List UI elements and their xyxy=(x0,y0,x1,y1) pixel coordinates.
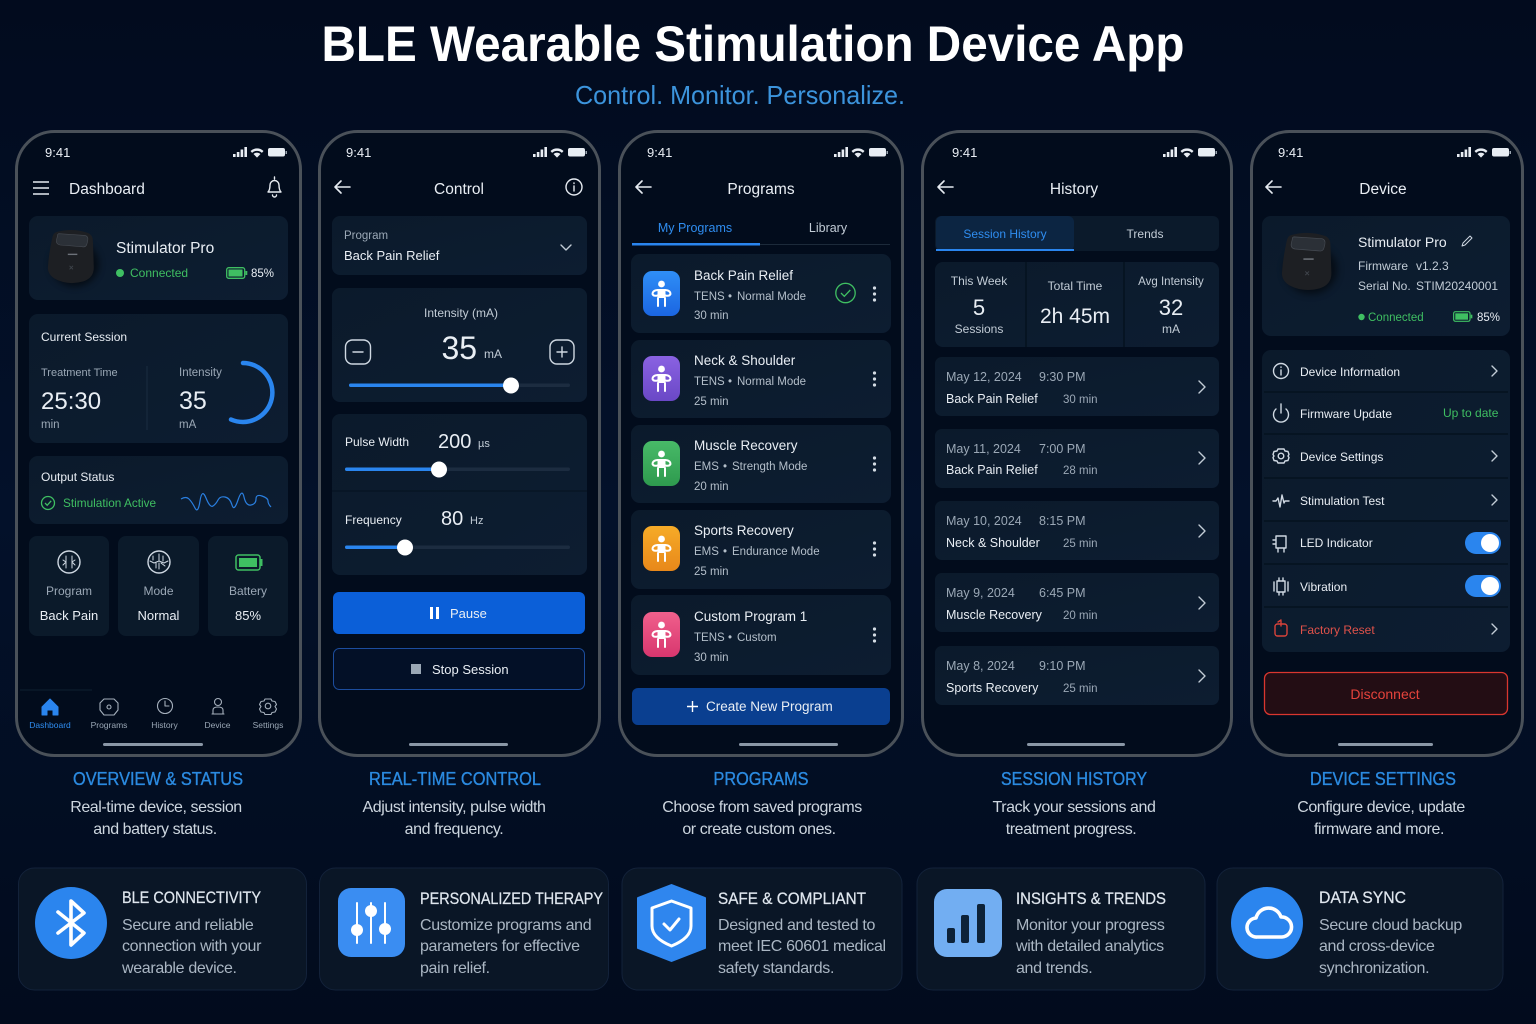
home indicator xyxy=(409,743,508,746)
program: sports recovery: Endurance Mode xyxy=(732,546,820,558)
tile: program xyxy=(29,536,109,636)
feature: BLE connectivity: wearable device. xyxy=(121,960,237,977)
device card: 85% xyxy=(1477,312,1500,324)
tile: battery xyxy=(208,536,288,636)
feature: insights and trends: Monitor your progress xyxy=(1016,917,1165,934)
intensity card xyxy=(332,288,587,402)
current session card: Current Session xyxy=(41,330,127,344)
tabs: My Programs xyxy=(658,221,732,235)
output status card: Stimulation Active xyxy=(63,496,157,510)
status bar xyxy=(45,145,287,160)
feature: safe and compliant: meet IEC 60601 medical xyxy=(718,938,886,955)
caption: programs: PROGRAMS xyxy=(714,769,808,789)
row: stimulation test xyxy=(1273,494,1497,508)
pulse and frequency card xyxy=(332,414,587,575)
program: neck and shoulder: • xyxy=(728,376,732,388)
feature: insights and trends xyxy=(917,868,1205,990)
session row 4: 6:45 PM xyxy=(1039,586,1086,600)
device card xyxy=(1262,216,1510,336)
session row 5 xyxy=(935,646,1219,705)
device card: 85% xyxy=(251,268,274,280)
program selector xyxy=(332,216,587,275)
feature: personalized therapy: PERSONALIZED THERAPY xyxy=(420,889,603,908)
status bar xyxy=(346,145,587,160)
caption: session history: SESSION HISTORY xyxy=(1001,769,1147,789)
tabs: Session History xyxy=(963,227,1047,241)
feature: data sync: Secure cloud backup xyxy=(1319,917,1462,934)
intensity card: mA xyxy=(484,347,502,361)
status bar: 9:41 xyxy=(1278,145,1303,160)
program: custom program 1: Custom xyxy=(737,632,777,644)
caption: real-time control: REAL-TIME CONTROL xyxy=(369,769,541,789)
pulse and frequency card: Hz xyxy=(470,515,483,527)
tabs: Library xyxy=(809,221,848,235)
header: History xyxy=(1050,181,1098,198)
device card: STIM20240001 xyxy=(1416,279,1498,293)
session row 5: 25 min xyxy=(1063,683,1098,695)
feature: insights and trends: INSIGHTS & TRENDS xyxy=(1016,889,1166,908)
tile: mode xyxy=(118,536,199,636)
row: factory reset xyxy=(1275,620,1497,637)
caption: overview and status: Real-time device, session xyxy=(70,799,242,816)
status bar xyxy=(647,145,888,160)
caption: real-time control xyxy=(363,769,545,838)
caption: session history: Track your sessions and xyxy=(993,799,1155,816)
session row 2: 7:00 PM xyxy=(1039,442,1086,456)
session row 4 xyxy=(935,573,1219,632)
header xyxy=(938,181,1098,198)
tile: battery: Battery xyxy=(229,584,267,598)
program: custom program 1: 30 min xyxy=(694,652,729,664)
row: factory reset: Factory Reset xyxy=(1300,623,1375,637)
program: custom program 1: Custom Program 1 xyxy=(694,609,807,624)
feature: data sync: DATA SYNC xyxy=(1319,888,1406,907)
feature: personalized therapy xyxy=(320,868,608,990)
row: device information: Device Information xyxy=(1300,365,1400,379)
program: sports recovery: Sports Recovery xyxy=(694,523,794,538)
feature: safe and compliant xyxy=(622,868,902,990)
stats card: 2h 45m xyxy=(1040,305,1110,328)
feature: safe and compliant: safety standards. xyxy=(718,960,834,977)
intensity card: Intensity (mA) xyxy=(424,306,498,320)
caption: device settings: firmware and more. xyxy=(1314,821,1444,838)
program: muscle recovery: 20 min xyxy=(694,481,729,493)
pulse and frequency card: µs xyxy=(478,438,490,450)
session row 2: 28 min xyxy=(1063,465,1098,477)
pause button: Pause xyxy=(450,606,487,621)
row: firmware update xyxy=(1274,404,1499,422)
caption: session history xyxy=(993,769,1155,838)
caption: programs: Choose from saved programs xyxy=(662,799,862,816)
icon: cloud xyxy=(1231,887,1303,959)
program selector: Back Pain Relief xyxy=(344,248,440,263)
program: neck and shoulder: Neck & Shoulder xyxy=(694,353,796,368)
feature: personalized therapy: parameters for effective xyxy=(420,938,580,955)
row: device settings xyxy=(1273,449,1497,464)
stats card: Sessions xyxy=(955,322,1003,336)
row: vibration: Vibration xyxy=(1300,580,1347,594)
row: stimulation test: Stimulation Test xyxy=(1300,494,1385,508)
status bar xyxy=(952,145,1217,160)
phone 4: history xyxy=(922,132,1232,756)
program: sports recovery: EMS xyxy=(694,546,719,558)
header: Device xyxy=(1359,181,1407,198)
caption: session history: treatment progress. xyxy=(1006,821,1136,838)
row: firmware update: Up to date xyxy=(1443,406,1499,420)
header: Dashboard xyxy=(69,181,145,198)
stats card: Total Time xyxy=(1048,279,1103,293)
feature: personalized therapy: pain relief. xyxy=(420,960,490,977)
header xyxy=(1266,181,1407,198)
session row 1 xyxy=(935,357,1219,416)
current session card: mA xyxy=(179,419,197,431)
phone 3: programs xyxy=(620,132,902,756)
title: BLE Wearable Stimulation Device App xyxy=(322,16,1184,72)
session row 4: May 9, 2024 xyxy=(946,586,1015,600)
session row 3: 25 min xyxy=(1063,538,1098,550)
session row 3: Neck & Shoulder xyxy=(946,536,1040,550)
pulse and frequency card: 80 xyxy=(441,508,463,530)
session row 3 xyxy=(935,501,1219,560)
stats card: 32 xyxy=(1159,295,1183,320)
tabs xyxy=(935,216,1219,251)
session row 3: 8:15 PM xyxy=(1039,514,1086,528)
stats card: 5 xyxy=(973,295,985,320)
program: back pain relief: Back Pain Relief xyxy=(694,268,793,283)
bottom navigation: Device xyxy=(205,720,231,730)
caption: device settings: DEVICE SETTINGS xyxy=(1310,769,1456,789)
phone 1: dashboard xyxy=(16,132,300,756)
tile: mode: Normal xyxy=(138,608,180,623)
feature: BLE connectivity: connection with your xyxy=(122,938,262,955)
device card: Connected xyxy=(130,266,188,280)
status bar: 9:41 xyxy=(952,145,977,160)
subtitle: Control. Monitor. Personalize. xyxy=(575,80,905,110)
session row 3: May 10, 2024 xyxy=(946,514,1022,528)
home indicator xyxy=(1338,743,1433,746)
program: muscle recovery xyxy=(631,425,891,503)
tabs xyxy=(632,221,890,246)
stop button xyxy=(334,648,584,690)
program: muscle recovery: EMS xyxy=(694,461,719,473)
caption: device settings: Configure device, update xyxy=(1297,799,1465,816)
program selector: Program xyxy=(344,230,388,242)
caption: overview and status: OVERVIEW & STATUS xyxy=(73,769,243,789)
phone 2: control xyxy=(320,132,600,756)
program: back pain relief: TENS xyxy=(694,291,725,303)
pause button xyxy=(333,592,585,634)
status bar: 9:41 xyxy=(45,145,70,160)
program: muscle recovery: • xyxy=(723,461,727,473)
feature: BLE connectivity: BLE CONNECTIVITY xyxy=(122,888,261,907)
tile: program: Back Pain xyxy=(40,608,98,623)
device card: Stimulator Pro xyxy=(1358,234,1447,250)
caption: programs xyxy=(662,769,862,838)
stats card: mA xyxy=(1162,322,1180,336)
bottom navigation: Settings xyxy=(253,720,283,730)
row: led indicator: LED Indicator xyxy=(1300,536,1373,550)
feature: data sync: synchronization. xyxy=(1319,960,1429,977)
session row 2 xyxy=(935,429,1219,488)
disconnect button: Disconnect xyxy=(1350,686,1420,702)
create new program button xyxy=(632,688,890,725)
caption: real-time control: Adjust intensity, pulse width xyxy=(363,799,545,816)
stop button: Stop Session xyxy=(432,662,509,677)
current session card: Intensity xyxy=(179,367,222,379)
row: device settings: Device Settings xyxy=(1300,450,1383,464)
output status card: Output Status xyxy=(41,470,114,484)
phone 5: device xyxy=(1252,132,1522,756)
feature: insights and trends: and trends. xyxy=(1016,960,1092,977)
icon: sliders xyxy=(338,888,405,957)
intensity card: 35 xyxy=(442,330,477,366)
session row 5: Sports Recovery xyxy=(946,681,1039,695)
stats card xyxy=(935,262,1219,347)
session row 1: 30 min xyxy=(1063,394,1098,406)
stats card: Avg Intensity xyxy=(1138,276,1204,288)
icon: shield xyxy=(638,885,705,961)
device card: v1.2.3 xyxy=(1416,259,1449,273)
stats card: This Week xyxy=(951,274,1008,288)
row: firmware update: Firmware Update xyxy=(1300,407,1392,421)
tile: mode: Mode xyxy=(143,584,174,598)
status bar xyxy=(1278,145,1511,160)
caption: overview and status xyxy=(70,769,243,838)
header xyxy=(636,181,795,198)
program: neck and shoulder xyxy=(631,340,891,418)
pulse and frequency card: 200 xyxy=(438,431,471,453)
session row 5: May 8, 2024 xyxy=(946,659,1015,673)
bottom navigation: Programs xyxy=(91,720,127,730)
header xyxy=(335,179,582,198)
caption: real-time control: and frequency. xyxy=(405,821,503,838)
header: Control xyxy=(434,181,484,198)
program: back pain relief: • xyxy=(728,291,732,303)
session row 5: 9:10 PM xyxy=(1039,659,1086,673)
program: back pain relief: 30 min xyxy=(694,310,729,322)
program: sports recovery xyxy=(631,510,891,589)
bottom navigation: History xyxy=(151,720,178,730)
feature: data sync xyxy=(1217,868,1503,990)
row: led indicator xyxy=(1273,532,1501,554)
device card: Stimulator Pro xyxy=(116,240,214,257)
feature: safe and compliant: SAFE & COMPLIANT xyxy=(718,889,866,908)
feature: BLE connectivity: Secure and reliable xyxy=(122,917,254,934)
program: muscle recovery: Strength Mode xyxy=(732,461,807,473)
program: sports recovery: 25 min xyxy=(694,566,729,578)
session row 1: 9:30 PM xyxy=(1039,370,1086,384)
row: vibration xyxy=(1274,575,1501,597)
status bar: 9:41 xyxy=(346,145,371,160)
feature: data sync: and cross-device xyxy=(1319,938,1435,955)
program: custom program 1: TENS xyxy=(694,632,725,644)
caption: device settings xyxy=(1297,769,1465,838)
output status card xyxy=(29,456,288,524)
home indicator xyxy=(1027,743,1125,746)
row: device information xyxy=(1274,364,1497,379)
icon: bar chart xyxy=(934,889,1002,957)
tile: program: Program xyxy=(46,584,92,598)
current session card: Treatment Time xyxy=(41,367,118,379)
home indicator xyxy=(739,743,838,746)
current session card: 35 xyxy=(179,387,207,415)
program: neck and shoulder: Normal Mode xyxy=(737,376,806,388)
pulse and frequency card: Frequency xyxy=(345,513,402,527)
session row 4: Muscle Recovery xyxy=(946,608,1043,622)
tile: battery: 85% xyxy=(235,608,261,623)
program: back pain relief xyxy=(631,254,891,333)
session row 2: Back Pain Relief xyxy=(946,463,1038,477)
icon: bluetooth xyxy=(35,887,107,959)
program: back pain relief: Normal Mode xyxy=(737,291,806,303)
session row 1: Back Pain Relief xyxy=(946,392,1038,406)
program: sports recovery: • xyxy=(723,546,727,558)
status bar: 9:41 xyxy=(647,145,672,160)
bottom navigation xyxy=(20,690,283,730)
device card xyxy=(29,216,288,300)
home indicator xyxy=(103,743,203,746)
program: neck and shoulder: TENS xyxy=(694,376,725,388)
feature: safe and compliant: Designed and tested to xyxy=(718,917,876,934)
bottom navigation: Dashboard xyxy=(29,720,71,730)
program: custom program 1: • xyxy=(728,632,732,644)
feature: insights and trends: with detailed analytics xyxy=(1015,938,1164,955)
current session card: min xyxy=(41,419,60,431)
caption: overview and status: and battery status. xyxy=(93,821,217,838)
device card: Serial No. xyxy=(1358,279,1411,293)
program: custom program 1 xyxy=(631,595,891,675)
session row 4: 20 min xyxy=(1063,610,1098,622)
feature: personalized therapy: Customize programs and xyxy=(420,917,591,934)
device card: Firmware xyxy=(1358,259,1408,273)
session row 2: May 11, 2024 xyxy=(946,442,1021,456)
device card: Connected xyxy=(1368,312,1424,324)
program: neck and shoulder: 25 min xyxy=(694,396,729,408)
disconnect button xyxy=(1264,672,1508,714)
settings list xyxy=(1262,350,1510,652)
program: muscle recovery: Muscle Recovery xyxy=(694,438,798,453)
feature: BLE connectivity xyxy=(18,868,306,990)
current session card: 25:30 xyxy=(41,388,101,415)
header: Programs xyxy=(727,181,795,198)
pulse and frequency card: Pulse Width xyxy=(345,435,409,449)
header xyxy=(33,177,281,198)
caption: programs: or create custom ones. xyxy=(682,821,836,838)
session row 1: May 12, 2024 xyxy=(946,370,1022,384)
tabs: Trends xyxy=(1127,227,1163,241)
current session card xyxy=(29,314,288,443)
create new program button: Create New Program xyxy=(706,699,833,714)
